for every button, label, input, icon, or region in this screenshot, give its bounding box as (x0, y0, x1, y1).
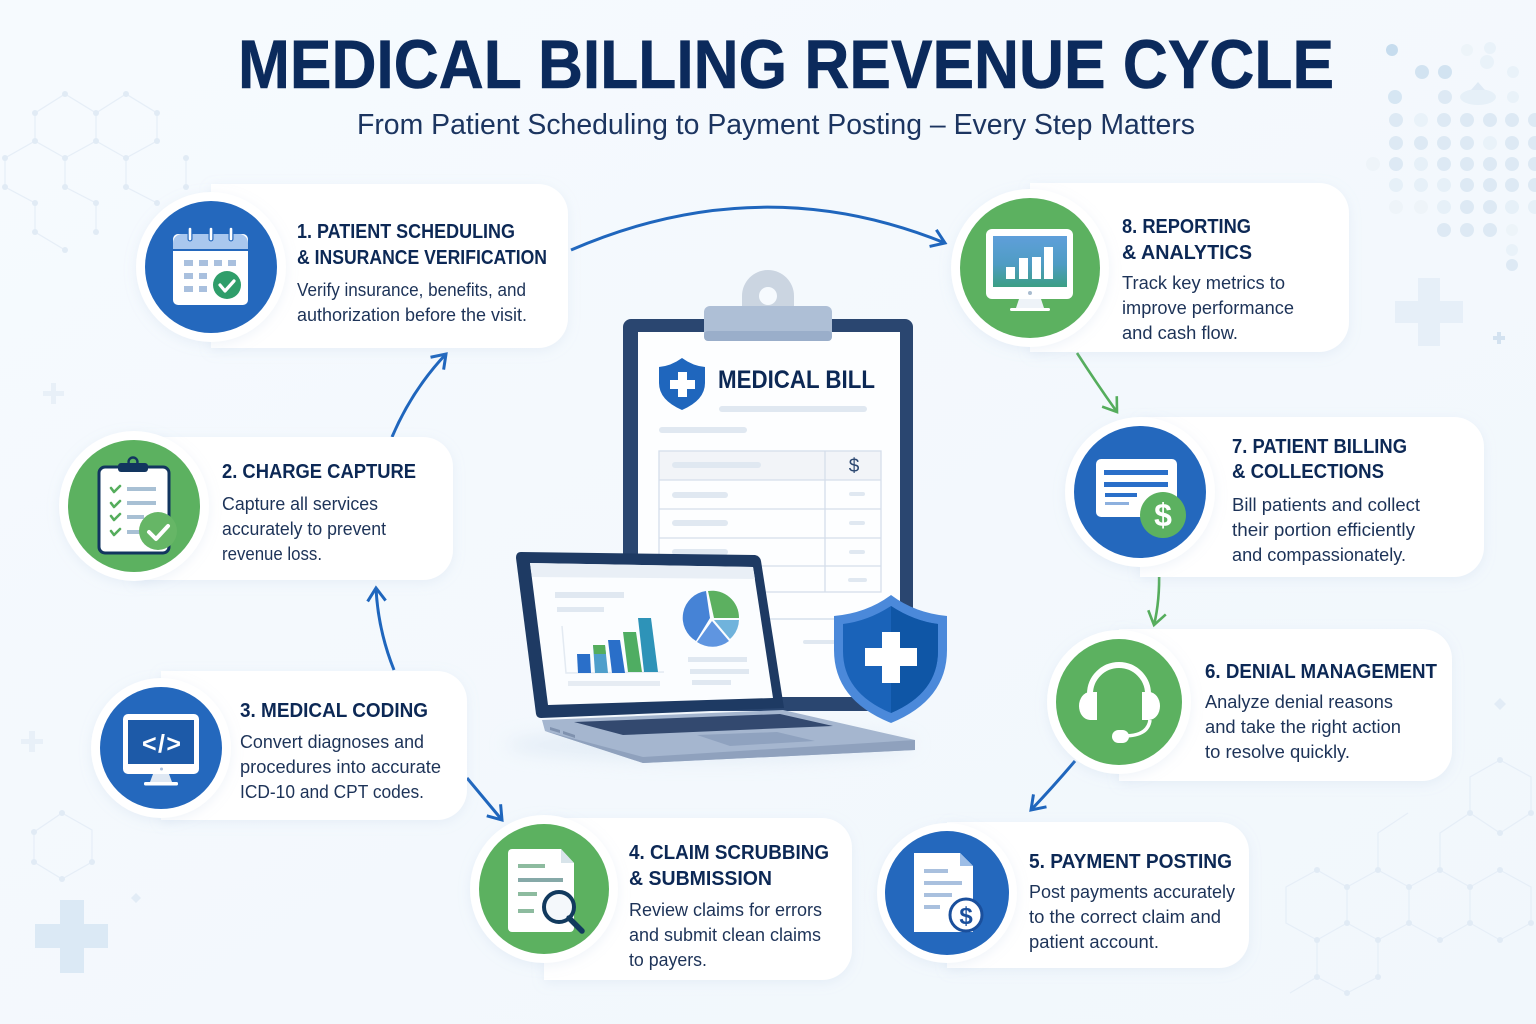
shield with cross (834, 595, 947, 723)
icon: monitor with bar chart (986, 229, 1073, 311)
text: step 6 (1205, 661, 1437, 762)
text: step 2: accurately to prevent (222, 519, 386, 539)
text: step 5: patient account. (1029, 932, 1159, 952)
text: step 4: and submit clean claims (629, 925, 821, 945)
arrow: step 7 to step 6 (1154, 570, 1159, 625)
text: step 2 (222, 461, 416, 564)
text: step 3: Convert diagnoses and (240, 732, 424, 752)
icon: headset (1079, 665, 1160, 743)
clipboard medical bill (623, 270, 913, 711)
text: step 6: to resolve quickly. (1205, 742, 1350, 762)
text: step 5: Post payments accurately (1029, 882, 1235, 902)
icon: document with magnifier (508, 849, 582, 932)
text: step 8: & ANALYTICS (1122, 242, 1252, 264)
text: step 4: 4. CLAIM SCRUBBING (629, 842, 829, 864)
panel: step 7 patient billing (1065, 417, 1484, 577)
text: step 4 (629, 842, 829, 970)
text: step 2: 2. CHARGE CAPTURE (222, 461, 416, 483)
panel: step 3 medical coding (91, 671, 467, 820)
text: step 3: procedures into accurate (240, 757, 441, 777)
icon: monitor with code: </> (142, 730, 181, 758)
arrow: step 3 to step 4 (467, 778, 502, 820)
icon: monitor with code (123, 714, 199, 786)
text: step 2: Capture all services (222, 494, 378, 514)
icon: bill with dollar (1096, 459, 1186, 538)
text: step 7 (1232, 436, 1420, 565)
text: step 7: Bill patients and collect (1232, 495, 1420, 515)
arrow: step 2 to step 1 (392, 354, 446, 437)
panel: step 6 denial management (1047, 629, 1452, 781)
text: step 8: Track key metrics to (1122, 273, 1285, 293)
text: step 5: 5. PAYMENT POSTING (1029, 851, 1232, 873)
text: step 4: to payers. (629, 950, 707, 970)
text: step 8: improve performance (1122, 298, 1294, 318)
text: step 5 (1029, 851, 1235, 952)
icon: invoice with dollar (914, 853, 982, 932)
text: step 4: & SUBMISSION (629, 868, 772, 890)
text: step 6: 6. DENIAL MANAGEMENT (1205, 661, 1437, 683)
text: step 2: revenue loss. (222, 544, 322, 564)
text: step 6: Analyze denial reasons (1205, 692, 1393, 712)
text: step 7: & COLLECTIONS (1232, 461, 1384, 483)
text: step 7: 7. PATIENT BILLING (1232, 436, 1407, 458)
panel: step 5 payment posting (877, 822, 1249, 968)
panel: step 1 patient scheduling (136, 184, 568, 348)
text: step 5: to the correct claim and (1029, 907, 1221, 927)
text: step 7: and compassionately. (1232, 545, 1406, 565)
text: step 3: ICD-10 and CPT codes. (240, 782, 424, 802)
clipboard medical bill: $ (849, 456, 860, 477)
central illustration: clipboard, laptop and shield (505, 270, 947, 763)
laptop with charts (516, 552, 915, 763)
arrow: step 1 to step 8 (571, 207, 945, 250)
text: step 8 (1122, 216, 1294, 343)
text: step 1: Verify insurance, benefits, and (297, 280, 526, 300)
text: step 1: 1. PATIENT SCHEDULING (297, 221, 515, 243)
text: step 7: their portion efficiently (1232, 520, 1415, 540)
text: step 8: and cash flow. (1122, 323, 1238, 343)
arrow: step 8 to step 7 (1077, 353, 1117, 412)
subtitle: From Patient Scheduling to Payment Posting – Every Step Matters (357, 109, 1195, 141)
text: step 4: Review claims for errors (629, 900, 822, 920)
text: step 1: & INSURANCE VERIFICATION (297, 247, 547, 269)
text: step 1 (297, 221, 547, 325)
clipboard medical bill: MEDICAL BILL (718, 366, 875, 394)
icon: clipboard checklist (99, 458, 177, 553)
text: step 8: 8. REPORTING (1122, 216, 1251, 238)
text: step 1: authorization before the visit. (297, 305, 527, 325)
arrow: step 6 to step 5 (1031, 761, 1075, 810)
panel: step 2 charge capture (59, 431, 453, 581)
panel: step 4 claim scrubbing (470, 815, 852, 980)
text: step 3: 3. MEDICAL CODING (240, 700, 428, 722)
icon: calendar (173, 229, 248, 305)
icon: invoice with dollar: $ (959, 903, 973, 930)
text: step 6: and take the right action (1205, 717, 1401, 737)
arrow: step 3 to step 2 (376, 588, 394, 670)
panel: step 8 reporting and analytics (951, 183, 1349, 352)
icon: bill with dollar: $ (1154, 497, 1172, 533)
title: MEDICAL BILLING REVENUE CYCLE (238, 26, 1334, 103)
text: step 3 (240, 700, 441, 802)
